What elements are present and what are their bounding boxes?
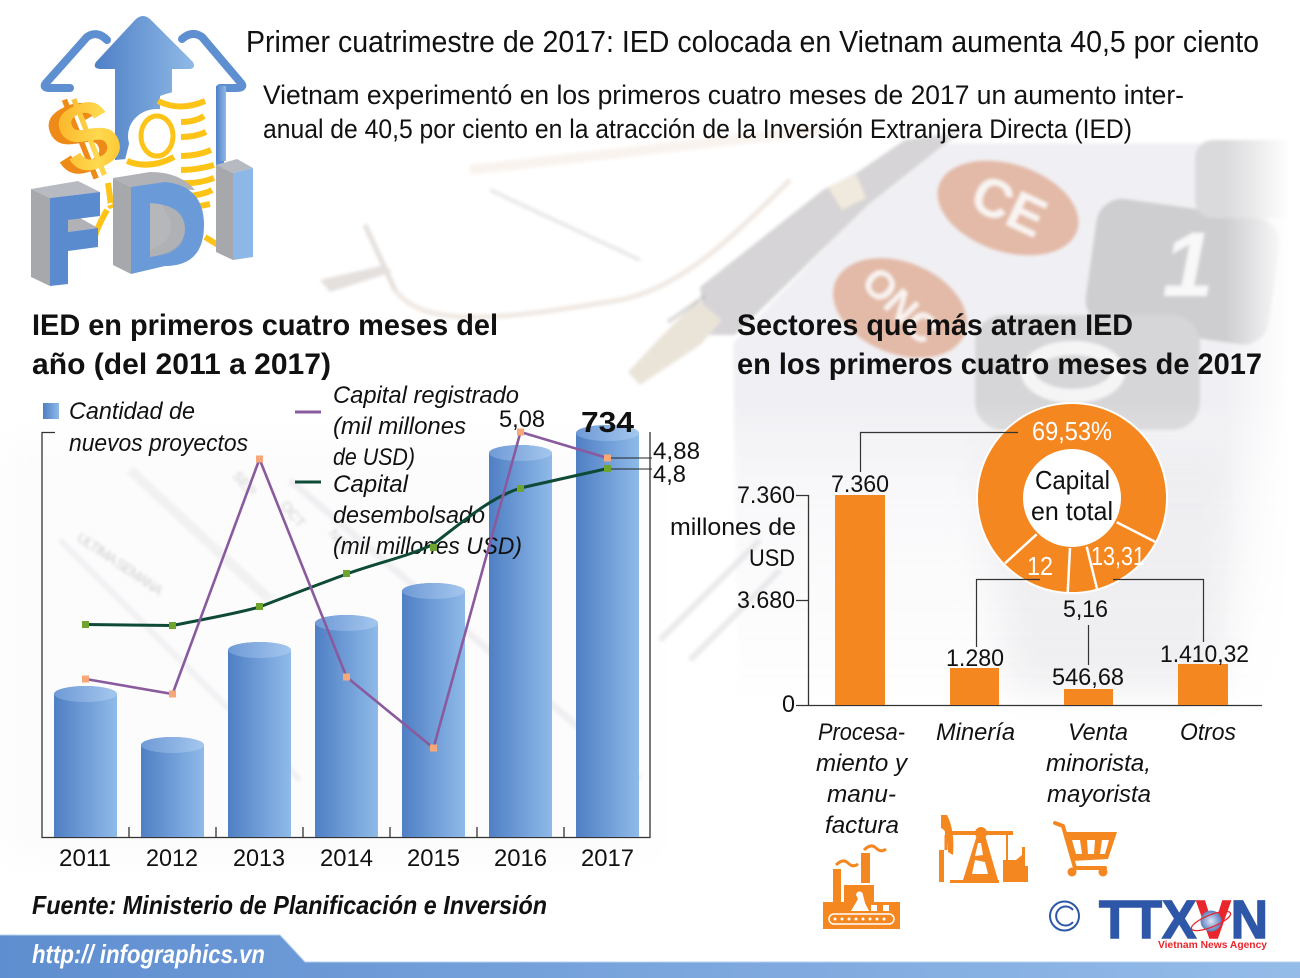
icon: dollar sign: $ (42, 74, 135, 199)
data labels: 4,88 (653, 438, 700, 465)
y-axis labels (670, 482, 796, 718)
logo: TTXVN Vietnam News Agency: TTXVN (1099, 890, 1268, 950)
legend: disbursed capital: desembolsado (333, 502, 485, 529)
legend: disbursed capital: Capital (333, 471, 409, 498)
y-axis labels: USD (749, 545, 795, 572)
category labels: Procesa- (818, 719, 905, 746)
heading: left chart: IED en primeros cuatro meses del (32, 309, 498, 342)
legend: projects: Cantidad de (69, 398, 195, 425)
year labels: 2015 (407, 845, 460, 872)
background photo: calculator, pen, glasses and ledger (59, 126, 1278, 781)
legend: disbursed capital: (mil millones USD) (333, 533, 522, 560)
heading: left chart: año (del 2011 a 2017) (32, 348, 331, 381)
legend: registered capital (295, 382, 519, 471)
value labels: 546,68 (1052, 664, 1124, 691)
footer band with URL tab (0, 935, 1300, 978)
category labels: Otros (1180, 719, 1236, 746)
category labels: miento y (816, 750, 909, 777)
category labels: factura (825, 812, 899, 839)
icon: coin stack (94, 90, 218, 250)
chart axes (42, 432, 650, 838)
value labels (831, 471, 1249, 691)
background photo: calculator, pen, glasses and ledger: 1 (1162, 214, 1214, 316)
legend: disbursed capital (295, 471, 522, 560)
icon: letter I (216, 159, 253, 260)
background photo: calculator, pen, glasses and ledger: CE (962, 163, 1056, 249)
intro text block (263, 80, 1184, 144)
year labels: 2014 (320, 845, 373, 872)
icon: shopping cart (1055, 823, 1117, 876)
leader lines for 2017 values (607, 458, 652, 469)
chart: donut of total capital: Capital (1035, 465, 1110, 495)
intro text block: anual de 40,5 por ciento en la atracción de la Inversión Extranjera Directa (IED) (263, 114, 1132, 144)
heading: right chart (737, 309, 1262, 381)
footer band with URL tab: http:// infographics.vn (32, 939, 265, 969)
legend: projects: nuevos proyectos (69, 430, 248, 457)
chart: sector bars (670, 471, 1262, 839)
y-axis labels: 0 (782, 691, 795, 718)
year labels: 2017 (581, 845, 634, 872)
chart: donut of total capital: 5,16 (1063, 596, 1108, 623)
line: registered capital (82, 428, 611, 752)
icon: copyright symbol (1050, 902, 1079, 930)
category labels: mayorista (1047, 781, 1151, 808)
background photo: calculator, pen, glasses and ledger: NOV (326, 526, 358, 560)
chart: donut of total capital: 13,31 (1091, 541, 1145, 571)
bars: number of new projects (54, 425, 639, 837)
legend: registered capital: (mil millones (333, 413, 466, 440)
value labels: 1.410,32 (1160, 641, 1249, 668)
icon: dollar sign: $ (31, 74, 129, 204)
chart: donut of total capital (976, 402, 1168, 623)
icon: FDI logo with arrows, coins and dollar (31, 16, 253, 286)
legend: registered capital: Capital registrado (333, 382, 519, 409)
legend: projects (43, 398, 248, 457)
heading: left chart (32, 309, 498, 381)
logo: TTXVN Vietnam News Agency: Vietnam News Agency (1158, 939, 1267, 951)
data labels: 5,08 (499, 406, 545, 433)
icon: letter F (31, 181, 100, 286)
chart: donut of total capital: 69,53% (1032, 416, 1112, 446)
background photo: calculator, pen, glasses and ledger: ULTIMA SEMANA (74, 529, 167, 599)
axis (796, 496, 1262, 706)
heading: right chart: en los primeros cuatro meses de 2017 (737, 348, 1262, 381)
y-axis labels: 7.360 (737, 482, 795, 509)
icon: letter D (113, 172, 204, 274)
icon: oil pump (939, 815, 1028, 883)
category labels: Venta (1068, 719, 1128, 746)
source note: Fuente: Ministerio de Planificación e Inversión (32, 890, 547, 920)
category labels: minorista, (1046, 750, 1151, 777)
year labels: 2011 (59, 845, 111, 872)
data labels: 4,8 (653, 461, 686, 488)
background photo: calculator, pen, glasses and ledger: OCT (278, 498, 309, 531)
icon: central up arrow (95, 16, 194, 160)
category labels (816, 719, 1236, 839)
line: disbursed capital (82, 465, 611, 629)
background photo: calculator, pen, glasses and ledger: ONC (853, 259, 947, 353)
legend: registered capital: de USD) (333, 444, 415, 471)
chart: projects bars and capital lines 2011-2017 (42, 382, 700, 872)
year labels: 2016 (494, 845, 547, 872)
leader lines from donut to bars (860, 432, 1204, 665)
data labels (499, 406, 700, 488)
category labels: Minería (936, 719, 1015, 746)
chart: donut of total capital: en total (1031, 496, 1113, 526)
year labels (59, 845, 634, 872)
icon: outlined house-arrow (45, 34, 242, 165)
data labels: 734 (581, 407, 634, 439)
value labels: 1.280 (946, 645, 1004, 672)
background photo: calculator, pen, glasses and ledger: SEP (230, 468, 260, 499)
y-axis labels: 3.680 (737, 587, 795, 614)
bars (835, 495, 1228, 705)
year labels: 2013 (233, 845, 285, 872)
intro text block: Vietnam experimentó en los primeros cuatro meses de 2017 un aumento inter- (263, 80, 1184, 110)
icon: factory (823, 846, 900, 929)
value labels: 7.360 (831, 471, 889, 498)
y-axis labels: millones de (670, 514, 796, 541)
category labels: manu- (827, 781, 896, 808)
year labels: 2012 (146, 845, 198, 872)
heading: right chart: Sectores que más atraen IED (737, 309, 1133, 342)
chart: donut of total capital: 12 (1027, 551, 1053, 581)
